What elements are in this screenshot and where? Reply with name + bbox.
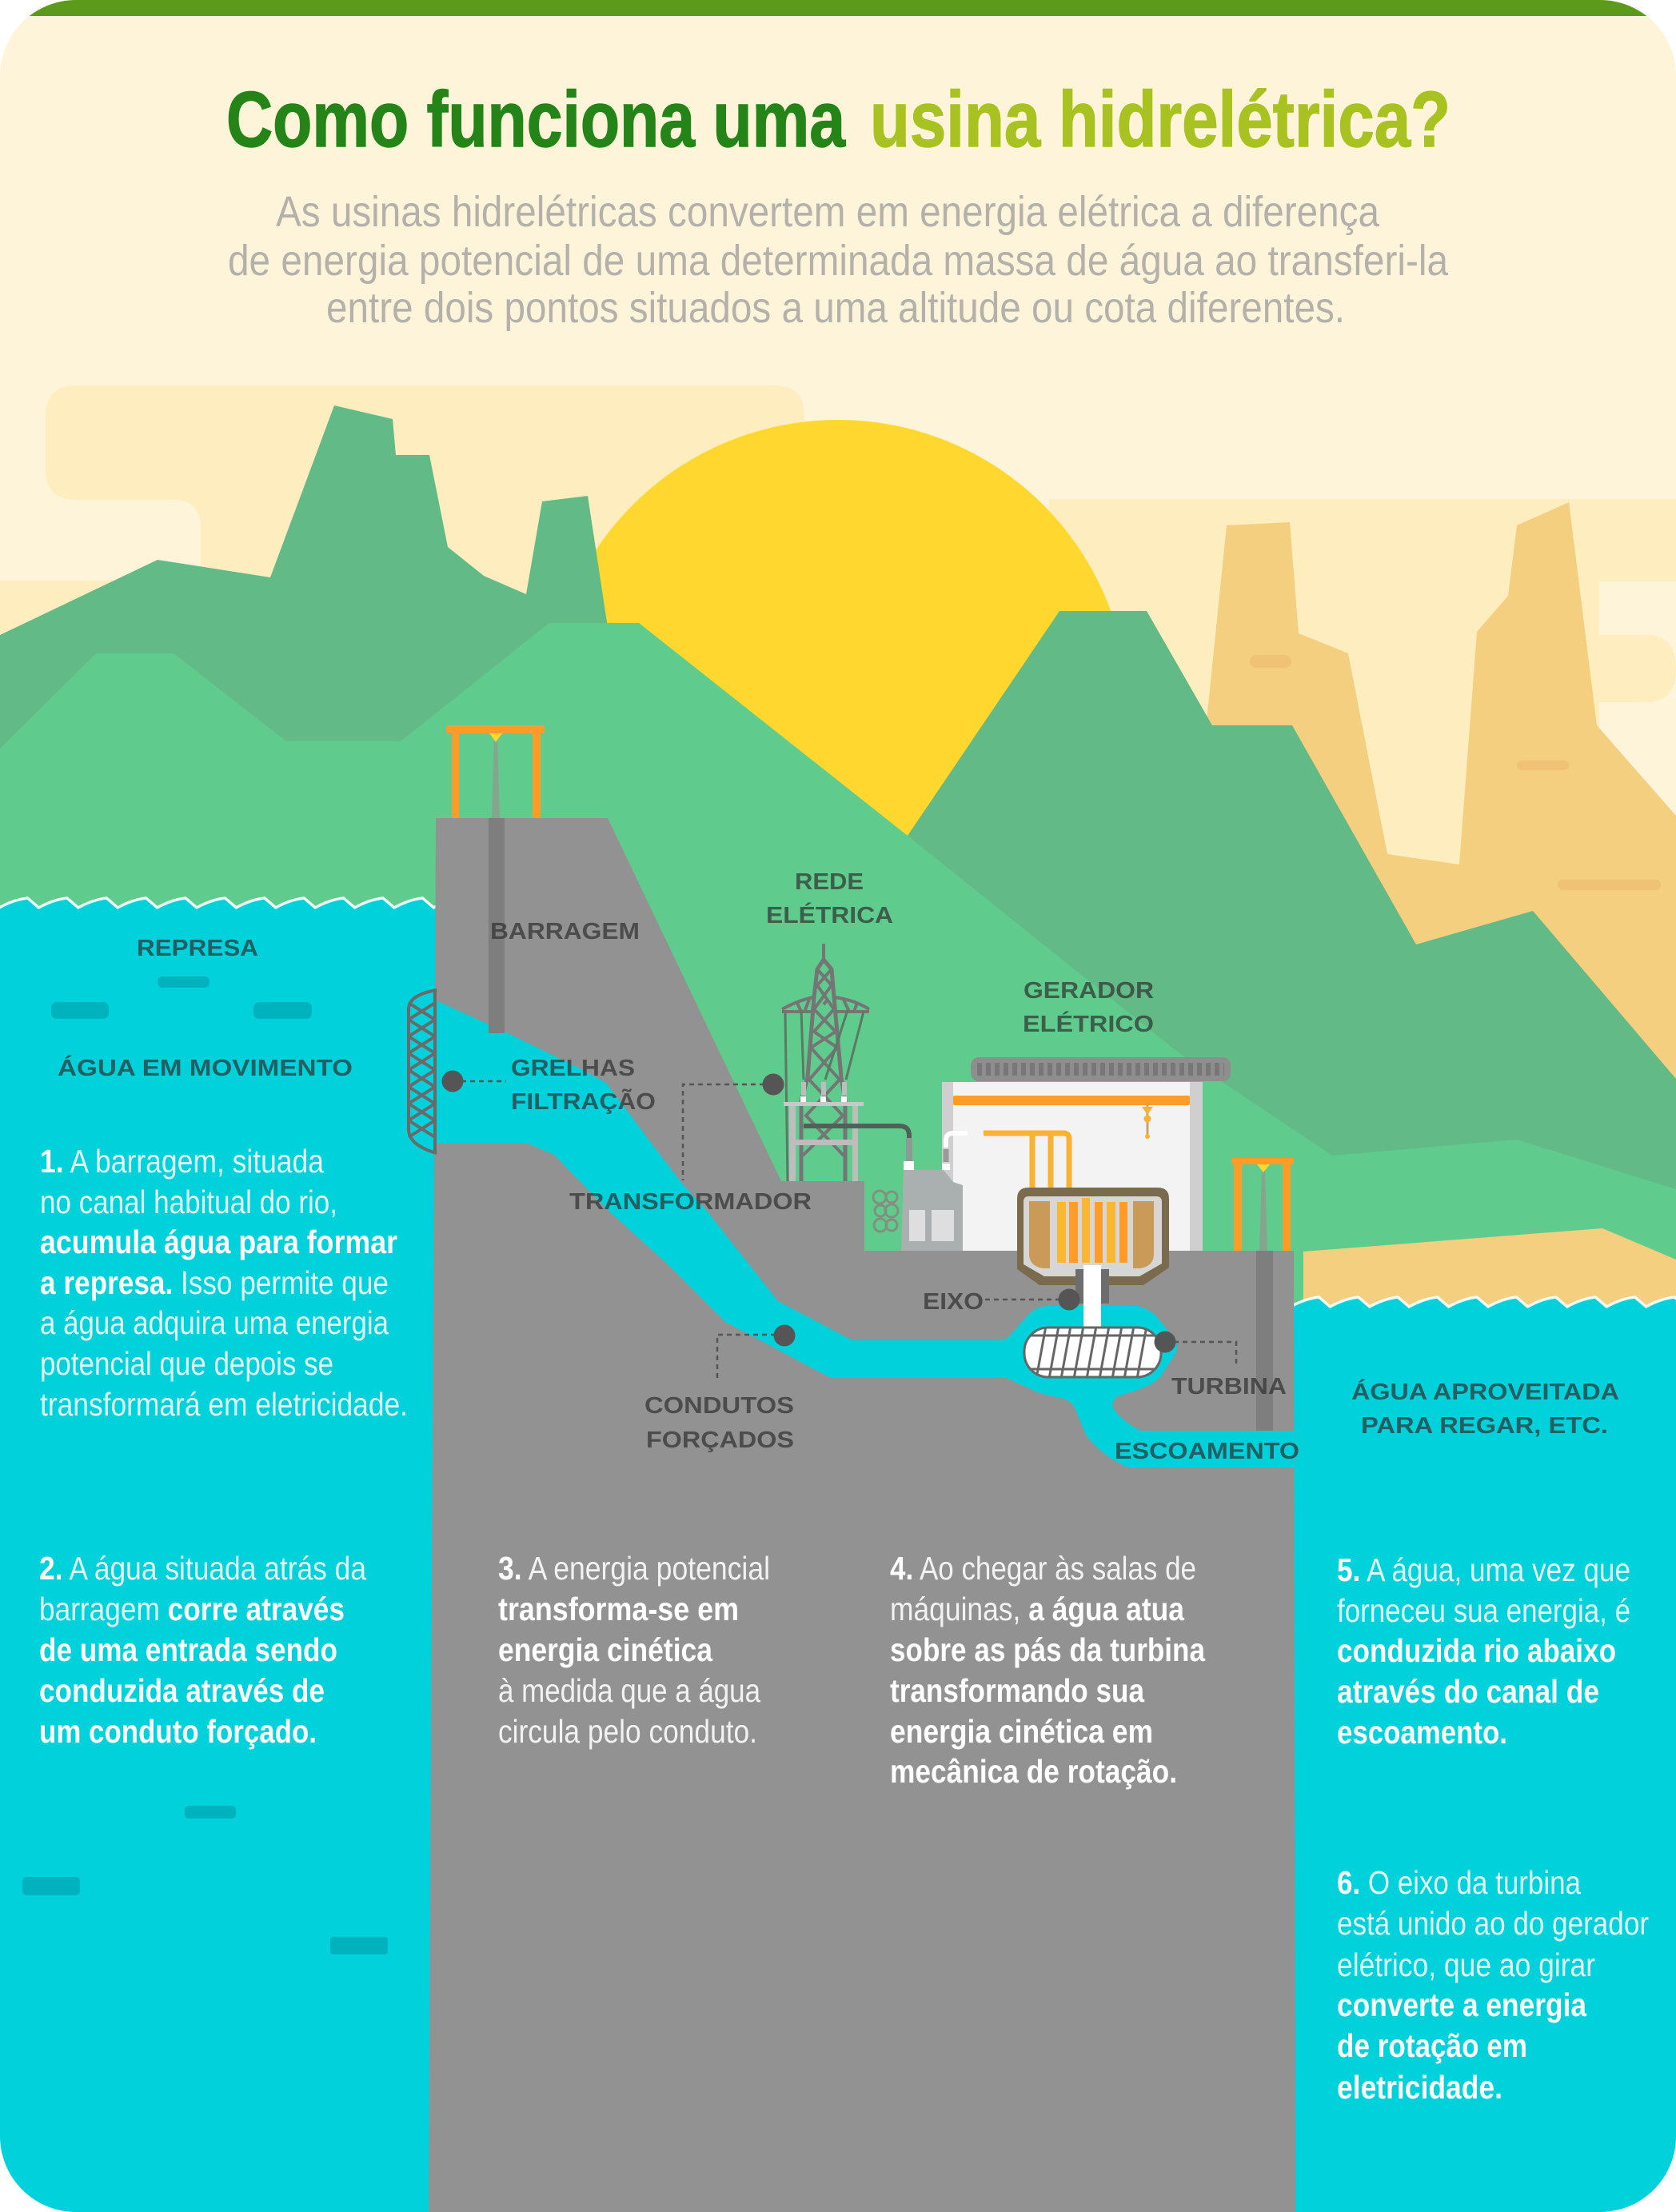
step 3 text: transforma-se em xyxy=(498,1591,739,1627)
yellow busbars xyxy=(984,1133,1069,1188)
step 4 text: 4. Ao chegar às salas de xyxy=(890,1550,1196,1587)
label: transformador: TRANSFORMADOR xyxy=(569,1189,812,1215)
step 5 text: 5. A água, uma vez que xyxy=(1337,1551,1630,1588)
step 1 text: transformará em eletricidade. xyxy=(40,1386,408,1423)
label: barragem: BARRAGEM xyxy=(490,919,640,944)
step 3 text: 3. A energia potencial xyxy=(498,1550,770,1587)
step 6 text: de rotação em xyxy=(1337,2027,1527,2064)
step 1 text: a água adquira uma energia xyxy=(40,1304,389,1341)
filtration grille xyxy=(409,990,437,1153)
transmission tower xyxy=(782,944,869,1181)
step 3 text: circula pelo conduto. xyxy=(498,1713,757,1750)
step 6 text xyxy=(1337,1864,1649,2106)
step 5 text: forneceu sua energia, é xyxy=(1337,1592,1630,1629)
label: rede elétrica: ELÉTRICA xyxy=(766,901,893,928)
label: água aproveitada: PARA REGAR, ETC. xyxy=(1361,1413,1608,1439)
label: água em movimento: ÁGUA EM MOVIMENTO xyxy=(58,1054,353,1081)
label: eixo: EIXO xyxy=(923,1289,984,1315)
label: grelhas filtração: FILTRAÇÃO xyxy=(511,1088,656,1115)
dam and ground xyxy=(429,818,1295,2212)
label: condutos forçados: CONDUTOS xyxy=(644,1393,794,1419)
intro text xyxy=(228,188,1449,332)
gate shaft left xyxy=(489,818,505,1033)
label: água aproveitada xyxy=(1351,1378,1619,1439)
power house building xyxy=(942,1057,1231,1251)
top green bar xyxy=(0,0,1676,16)
step 6 text: 6. O eixo da turbina xyxy=(1337,1864,1581,1901)
title: usina hidrelétrica? xyxy=(870,75,1451,163)
step 4 text: energia cinética em xyxy=(890,1713,1153,1750)
rock texture xyxy=(873,1191,898,1232)
label: represa: REPRESA xyxy=(137,936,258,961)
step 2 text: de uma entrada sendo xyxy=(39,1631,337,1668)
step 1 text: potencial que depois se xyxy=(40,1345,333,1382)
label: gerador elétrico: GERADOR xyxy=(1024,978,1154,1004)
transformer xyxy=(901,1133,968,1251)
front mountains xyxy=(0,623,1676,1360)
step 3 text: à medida que a água xyxy=(498,1672,760,1709)
cable tower to transformer xyxy=(804,1126,909,1161)
label: água aproveitada: ÁGUA APROVEITADA xyxy=(1351,1378,1619,1405)
step 1 text: a represa. Isso permite que xyxy=(40,1264,389,1301)
back mountain right xyxy=(908,611,1676,1216)
orange gantry left xyxy=(446,725,545,818)
gate shaft right xyxy=(1256,1251,1273,1431)
step 3 text: energia cinética xyxy=(498,1631,713,1668)
step 1 text: acumula água para formar xyxy=(40,1224,397,1260)
label: turbina: TURBINA xyxy=(1171,1374,1287,1399)
step 4 text: transformando sua xyxy=(890,1672,1145,1709)
step 5 text: escoamento. xyxy=(1337,1714,1507,1751)
step 1 text: no canal habitual do rio, xyxy=(40,1184,337,1220)
step 2 text: um conduto forçado. xyxy=(39,1713,317,1750)
water dashes xyxy=(22,976,388,1954)
step 6 text: converte a energia xyxy=(1337,1986,1587,2023)
step 5 text: através do canal de xyxy=(1337,1673,1599,1710)
step 2 text: 2. A água situada atrás da xyxy=(39,1550,366,1587)
step 2 text: barragem corre através xyxy=(39,1591,345,1627)
desert cliffs xyxy=(1199,502,1676,1120)
step 5 text xyxy=(1337,1551,1630,1751)
step 4 text: mecânica de rotação. xyxy=(890,1753,1177,1790)
orange gantry right xyxy=(1231,1158,1294,1251)
shaft xyxy=(1075,1265,1109,1328)
haze clouds xyxy=(0,385,1676,880)
back mountain left xyxy=(0,405,608,749)
step 4 text xyxy=(890,1550,1206,1790)
step 4 text: máquinas, a água atua xyxy=(890,1591,1185,1627)
step 1 text xyxy=(40,1143,408,1423)
label: gerador elétrico xyxy=(1023,978,1154,1037)
intro text: entre dois pontos situados a uma altitude ou cota diferentes. xyxy=(326,284,1345,332)
step 3 text xyxy=(498,1550,770,1750)
callout lines and dots xyxy=(441,1070,1236,1380)
intro text: As usinas hidrelétricas convertem em energia elétrica a diferença xyxy=(276,188,1380,236)
label: condutos forçados xyxy=(644,1393,794,1453)
title: Como funciona uma xyxy=(226,75,846,163)
label: grelhas filtração xyxy=(511,1056,656,1115)
turbine xyxy=(1024,1326,1161,1379)
label: rede elétrica: REDE xyxy=(795,869,864,895)
step 2 text: conduzida através de xyxy=(39,1672,325,1709)
step 6 text: elétrico, que ao girar xyxy=(1337,1946,1595,1983)
step 5 text: conduzida rio abaixo xyxy=(1337,1632,1616,1669)
intro text: de energia potencial de uma determinada massa de água ao transferi-la xyxy=(228,237,1449,285)
step 1 text: 1. A barragem, situada xyxy=(40,1143,324,1180)
penstock water channel xyxy=(436,1000,1294,1467)
step 4 text: sobre as pás da turbina xyxy=(890,1631,1206,1668)
label: condutos forçados: FORÇADOS xyxy=(646,1427,794,1453)
label: rede elétrica xyxy=(768,873,892,923)
label: escoamento: ESCOAMENTO xyxy=(1115,1439,1299,1464)
generator xyxy=(1017,1188,1169,1285)
downstream water xyxy=(1279,1297,1676,2212)
label: grelhas filtração: GRELHAS xyxy=(511,1056,635,1081)
sun xyxy=(596,420,1111,841)
step 2 text xyxy=(39,1550,366,1750)
step 6 text: eletricidade. xyxy=(1337,2069,1502,2106)
reservoir water xyxy=(0,898,462,2212)
sand bank xyxy=(1303,1228,1676,1307)
label: gerador elétrico: ELÉTRICO xyxy=(1023,1010,1154,1037)
title xyxy=(229,88,1447,148)
